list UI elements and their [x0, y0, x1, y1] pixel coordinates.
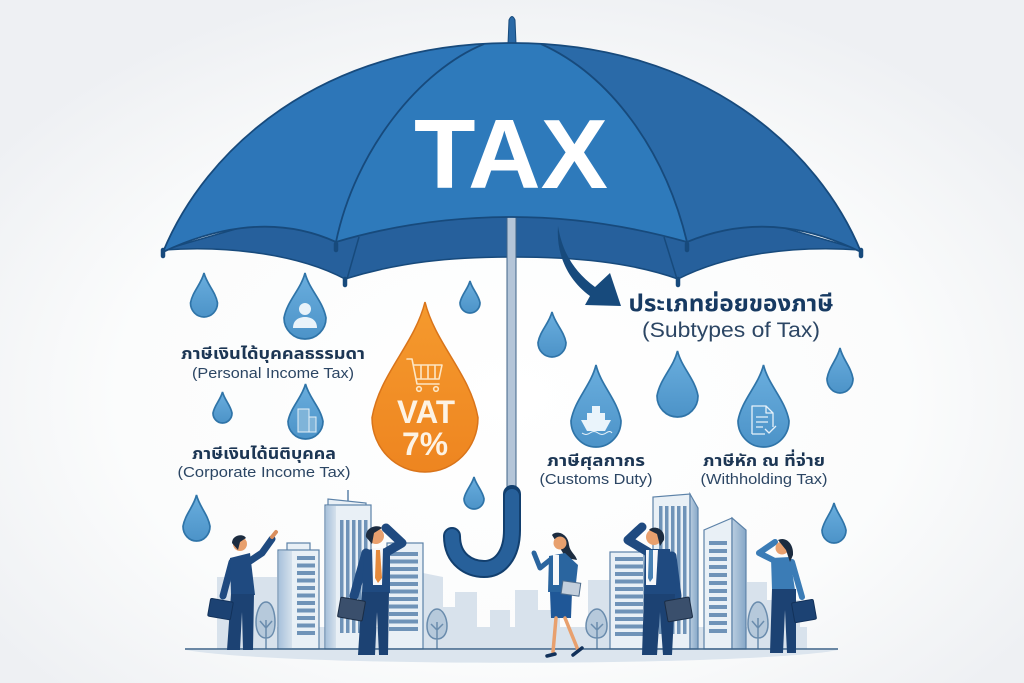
building: left tower	[325, 490, 371, 649]
canopy centre panel	[612, 98, 686, 240]
rib ends	[163, 244, 861, 285]
building: right low-rise	[610, 552, 644, 649]
text: corporate income tax	[178, 445, 350, 481]
title: TAX	[414, 99, 608, 209]
text: customs duty	[540, 453, 652, 488]
person: man with blue tie	[628, 527, 693, 655]
arrow	[558, 226, 621, 306]
person: woman with briefcase	[759, 539, 817, 653]
text: customs duty: (Customs Duty)	[540, 472, 652, 488]
VAT drop	[372, 302, 478, 472]
text: withholding tax: (Withholding Tax)	[700, 472, 828, 488]
person: man looking up, left	[208, 532, 276, 650]
trees	[256, 602, 768, 649]
briefcase	[337, 597, 366, 621]
building: behind second man	[387, 543, 423, 649]
heading: subtypes of tax	[628, 290, 834, 342]
text: corporate income tax: ภาษีเงินได้นิติบุคคล	[192, 445, 336, 463]
ground line	[185, 649, 838, 663]
umbrella	[163, 16, 880, 569]
drop: withholding tax	[738, 365, 789, 447]
briefcase	[791, 599, 817, 623]
text: personal income tax	[181, 345, 365, 382]
city skyline	[217, 490, 807, 649]
icon: document	[752, 406, 776, 434]
person: woman with folder	[534, 533, 582, 656]
canopy	[163, 43, 861, 252]
briefcase	[208, 598, 233, 620]
umbrella underside band	[163, 200, 861, 279]
text: withholding tax	[700, 449, 828, 488]
drop: corporate income tax	[288, 384, 323, 439]
VAT drop: 7%	[402, 426, 448, 462]
heading: subtypes of tax: ประเภทย่อยของภาษี	[628, 290, 834, 316]
building: left low-rise	[278, 543, 319, 649]
icon: ship	[581, 406, 612, 434]
text: customs duty: ภาษีศุลกากร	[547, 453, 645, 470]
shaft	[507, 217, 516, 497]
icon: person	[293, 303, 317, 328]
text: corporate income tax: (Corporate Income Tax)	[178, 465, 350, 481]
icon: shopping cart	[407, 359, 442, 391]
VAT label: VAT	[397, 394, 455, 430]
scallop rims	[163, 227, 861, 252]
handle	[452, 494, 512, 569]
umbrella tip	[508, 16, 516, 44]
plain rain drops	[183, 273, 853, 543]
text: withholding tax: ภาษีหัก ณ ที่จ่าย	[703, 449, 825, 470]
canopy right panel	[546, 45, 859, 250]
folder	[561, 581, 581, 596]
icon: buildings	[298, 409, 316, 432]
briefcase	[664, 597, 693, 622]
text: personal income tax: ภาษีเงินได้บุคคลธรรมดา	[181, 345, 365, 363]
person: man with orange tie	[337, 526, 402, 655]
drop: personal income tax	[284, 273, 326, 339]
canopy ribs	[336, 44, 687, 242]
building: right tower	[653, 494, 698, 649]
text: personal income tax: (Personal Income Tax)	[192, 366, 354, 382]
building: far right tower	[704, 518, 746, 649]
drop: customs duty	[571, 365, 621, 447]
heading: subtypes of tax: (Subtypes of Tax)	[642, 319, 820, 342]
